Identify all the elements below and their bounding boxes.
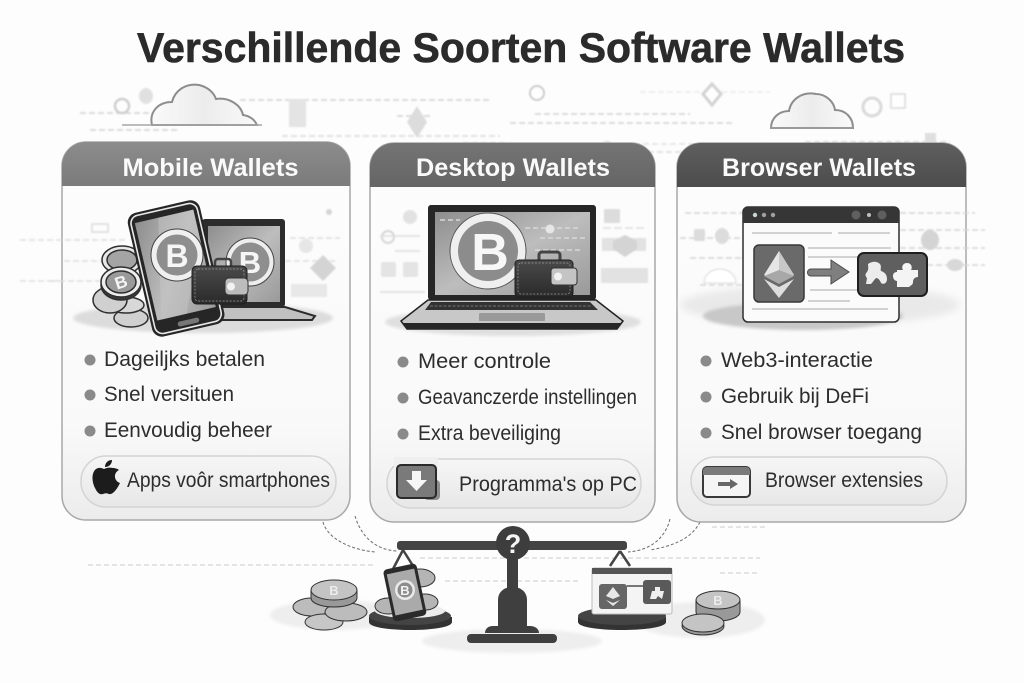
decorative network band with clouds — [80, 84, 950, 155]
pill: extensions — [691, 457, 947, 505]
illustration: phone, laptop, coins and wallet: B — [165, 238, 189, 274]
question badge — [496, 526, 530, 560]
laptop: B — [239, 245, 261, 280]
bullet list: Dageiljks betalen — [104, 348, 265, 371]
balance scale comparison — [270, 526, 765, 653]
header bar — [370, 143, 655, 187]
header bar — [62, 142, 350, 186]
bullet list — [84, 348, 272, 442]
panel card — [62, 142, 350, 520]
right coin stack — [682, 591, 740, 635]
coin pile: B — [112, 272, 130, 293]
illustration: phone, laptop, coins and wallet — [73, 198, 333, 339]
right pan with browser window — [578, 551, 672, 630]
left coin stack — [293, 580, 367, 630]
pill: apps: Apps voôr smartphones — [127, 469, 330, 492]
icon: apple — [92, 460, 120, 494]
question badge: ? — [505, 529, 521, 559]
laptop base — [401, 300, 623, 329]
bullet list: Snel versituen — [104, 383, 234, 406]
icon: browser extension — [703, 467, 750, 497]
panel: desktop wallets — [370, 143, 655, 522]
title: Verschillende Soorten Software Wallets — [137, 24, 905, 71]
left coin stack: B — [329, 583, 339, 598]
bullet list — [700, 349, 922, 444]
icon: download — [394, 457, 440, 500]
bullet list: Meer controle — [418, 350, 551, 373]
background pattern — [380, 209, 648, 292]
arrow — [808, 260, 849, 284]
bullet list: Extra beveiliging — [418, 422, 561, 445]
background pattern — [20, 209, 340, 297]
panel: mobile wallets — [20, 142, 350, 520]
background pattern — [680, 213, 985, 285]
illustration: laptop with coin and wallet — [385, 205, 641, 336]
connector lines from panels to scale — [323, 516, 700, 552]
pill: extensions: Browser extensies — [765, 469, 923, 492]
browser window — [743, 207, 899, 322]
scale stand — [467, 558, 557, 643]
panel card — [677, 143, 966, 522]
phone — [126, 198, 226, 339]
pill: programs — [387, 457, 641, 508]
panel: browser wallets — [677, 143, 985, 522]
ground shadows — [270, 600, 765, 653]
pill: programs: Programma's op PC — [459, 473, 637, 496]
right coin stack: B — [713, 593, 723, 608]
illustration: laptop with coin and wallet: B — [471, 224, 509, 282]
icon: left cloud — [122, 85, 262, 125]
pill: apps — [81, 456, 336, 507]
decorative lower dashes — [88, 527, 765, 581]
bullet list: Geavanczerde instellingen — [418, 386, 637, 409]
wallet — [515, 252, 577, 297]
left pan with phone and coins: B — [400, 583, 410, 598]
coin pile — [93, 246, 148, 327]
bitcoin coin — [450, 213, 526, 289]
puzzle tile — [858, 253, 927, 296]
ethereum tile — [754, 245, 804, 302]
left pan with phone and coins — [369, 550, 452, 630]
bullet list: Web3-interactie — [721, 349, 873, 372]
panel heading: Desktop Wallets — [416, 154, 610, 182]
panel card — [370, 143, 655, 522]
panel heading: Browser Wallets — [722, 154, 916, 182]
laptop — [202, 219, 315, 320]
icon: right cloud — [770, 93, 853, 128]
bullet list: Snel browser toegang — [721, 421, 922, 444]
wallet — [192, 259, 248, 304]
panel heading: Mobile Wallets — [122, 154, 298, 182]
header bar — [677, 143, 966, 187]
bullet list: Gebruik bij DeFi — [721, 385, 869, 408]
bullet list: Eenvoudig beheer — [104, 419, 272, 442]
ground wash — [680, 285, 960, 325]
scale beam — [397, 541, 627, 550]
laptop screen — [428, 205, 596, 300]
bullet list — [398, 350, 637, 445]
illustration: browser window with ethereum and puzzle — [703, 207, 927, 330]
